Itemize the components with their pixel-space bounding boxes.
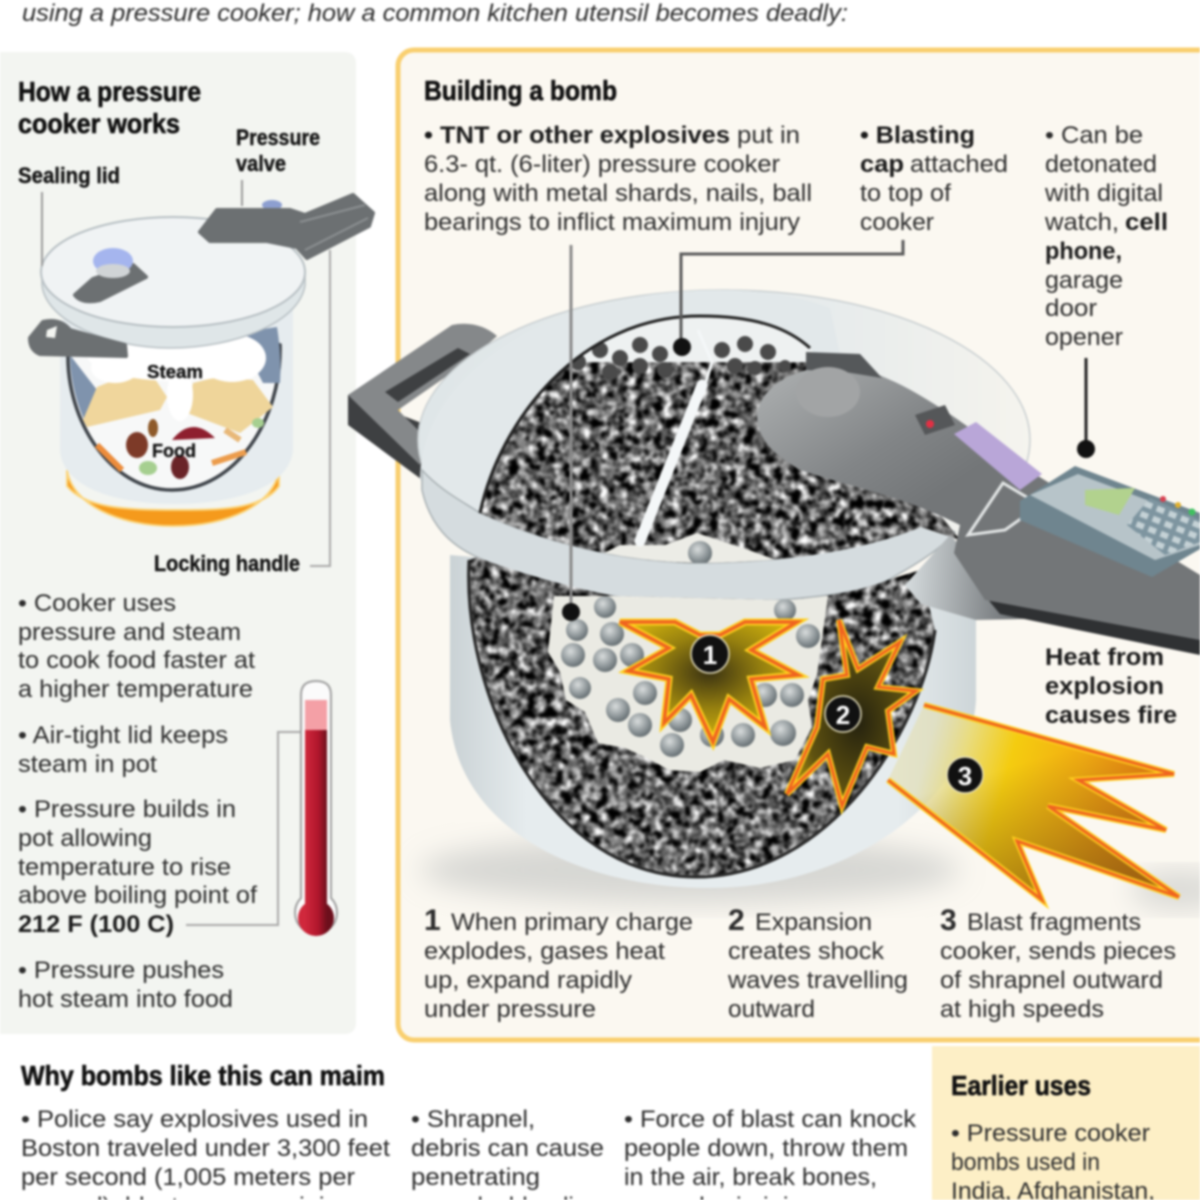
panel: building a bomb xyxy=(348,50,1200,1040)
text: heat from explosion xyxy=(1045,644,1177,729)
marker 1 xyxy=(691,635,729,673)
text: how it works bullets: pot allowing xyxy=(18,825,152,852)
text: earlier uses: bombs used in xyxy=(951,1149,1100,1176)
main charge xyxy=(548,596,828,772)
text: detonator: with digital xyxy=(1044,180,1163,207)
text: how it works bullets: • Air-tight lid keeps xyxy=(18,722,228,749)
text: how it works bullets: • Pressure pushes xyxy=(18,957,224,984)
text: explosives: put in xyxy=(737,122,800,149)
text: how it works bullets: steam in pot xyxy=(18,751,157,778)
label: food: Food xyxy=(152,441,196,461)
text: how it works bullets: hot steam into food xyxy=(18,986,233,1013)
pot body xyxy=(450,555,976,888)
text: explosive speed: • Police say explosives used in xyxy=(21,1106,368,1133)
step 3 text: Blast fragments xyxy=(967,909,1141,936)
text: shrapnel xyxy=(410,1106,604,1200)
label: pressure valve xyxy=(236,125,320,206)
step 2 text: 2 xyxy=(728,904,745,937)
label: sealing lid: Sealing lid xyxy=(18,163,120,188)
text: how it works bullets: to cook food faster at xyxy=(18,647,255,674)
text: explosive speed: per second (1,005 meters per xyxy=(21,1164,355,1191)
illustration: bomb cooker cutaway xyxy=(348,290,1200,910)
intro text: using a pressure cooker; how a common kitchen utensil becomes deadly: xyxy=(22,0,848,27)
lower window outline xyxy=(469,560,935,877)
leader line: detonator xyxy=(1077,358,1095,458)
heading: earlier uses: Earlier uses xyxy=(951,1070,1091,1101)
text: heat from explosion: Heat from xyxy=(1045,644,1164,671)
food pieces xyxy=(97,418,264,479)
label: pressure valve: valve xyxy=(236,151,286,176)
text: earlier uses xyxy=(951,1120,1155,1200)
label: locking handle xyxy=(154,250,330,576)
text: explosives xyxy=(424,122,812,236)
text: explosives: • TNT or other explosives xyxy=(424,122,730,149)
label: steam: Steam xyxy=(147,362,203,382)
text: how it works bullets: • Pressure builds in xyxy=(18,796,236,823)
text: heat from explosion: causes fire xyxy=(1045,702,1177,729)
step 3 text: at high speeds xyxy=(940,996,1104,1023)
text: detonator: detonated xyxy=(1045,151,1157,178)
step 2 text: creates shock xyxy=(728,938,885,965)
text: detonator: cell xyxy=(1125,209,1168,236)
text: force of blast: • Force of blast can knock xyxy=(624,1106,917,1133)
text: shrapnel: penetrating xyxy=(411,1164,540,1191)
lower cutaway with shrapnel xyxy=(455,550,945,885)
step 2 text: outward xyxy=(728,996,815,1023)
upper cutaway with shrapnel xyxy=(470,310,970,570)
heading: how a pressure cooker works: How a pressure xyxy=(18,76,201,107)
text: explosive speed: Boston traveled under 3,300 feet xyxy=(21,1135,390,1162)
heading: why bombs can maim: Why bombs like this can maim xyxy=(21,1060,385,1091)
text: detonator: watch, xyxy=(1044,209,1119,236)
burst 1 xyxy=(620,622,798,742)
blasting cap rod xyxy=(640,385,702,541)
step 1 text: up, expand rapidly xyxy=(424,967,632,994)
text: shrapnel: • Shrapnel, xyxy=(411,1106,535,1133)
step 1 text: When primary charge xyxy=(451,909,693,936)
text: how it works bullets: above boiling point of xyxy=(18,882,257,909)
text: how it works bullets: 212 F (100 C) xyxy=(18,911,174,938)
step 3 text: 3 xyxy=(940,904,957,937)
marker 2 xyxy=(825,696,861,732)
text: force of blast: in the air, break bones, xyxy=(624,1164,877,1191)
marker 3: 3 xyxy=(958,761,972,791)
label: locking handle: Locking handle xyxy=(154,551,300,576)
step 1 text: explodes, gases heat xyxy=(424,938,665,965)
illustration: small pressure cooker xyxy=(30,195,373,526)
step 2 text xyxy=(727,904,908,1023)
step 3 text: cooker, sends pieces xyxy=(940,938,1176,965)
fire blast xyxy=(888,705,1179,900)
text: earlier uses: • Pressure cooker xyxy=(951,1120,1150,1147)
text: how it works bullets xyxy=(18,590,257,1013)
text: detonator: • Can be xyxy=(1045,122,1143,149)
step 1 text: 1 xyxy=(424,904,441,937)
heading: how a pressure cooker works xyxy=(18,76,201,139)
text: explosives: 6.3- qt. (6-liter) pressure cooker xyxy=(424,151,780,178)
label: pressure valve: Pressure xyxy=(236,125,320,150)
text: blasting cap: cap xyxy=(860,151,904,178)
text: blasting cap xyxy=(860,122,1008,236)
text: blasting cap: to top of xyxy=(860,180,951,207)
text: force of blast: people down, throw them xyxy=(624,1135,908,1162)
text: detonator xyxy=(1044,122,1168,351)
label: sealing lid xyxy=(18,163,120,266)
text: how it works bullets: • Cooker uses xyxy=(18,590,176,617)
lid xyxy=(418,290,1030,605)
left pot handle xyxy=(348,324,497,482)
marker 1: 1 xyxy=(703,640,717,670)
panel: earlier uses xyxy=(932,1046,1200,1200)
text: shrapnel: debris can cause xyxy=(411,1135,604,1162)
text: how it works bullets: temperature to rise xyxy=(18,854,231,881)
step 1 text xyxy=(424,904,693,1023)
text: blasting cap: attached xyxy=(910,151,1008,178)
text: explosive speed xyxy=(21,1106,390,1200)
purple detonator strip xyxy=(954,422,1042,490)
text: how it works bullets: pressure and steam xyxy=(18,619,241,646)
burst 1 outline xyxy=(620,622,798,742)
burst 2 xyxy=(787,620,916,806)
blasting cap wires xyxy=(698,330,712,385)
text: detonator: garage xyxy=(1045,267,1123,294)
burst 2 outline xyxy=(787,620,916,806)
leader line: explosives xyxy=(562,245,580,621)
step 3 text: of shrapnel outward xyxy=(940,967,1163,994)
text: heat from explosion: explosion xyxy=(1045,673,1164,700)
section: why bombs like this can maim xyxy=(21,1060,917,1200)
marker 2: 2 xyxy=(836,700,850,730)
step 2 text: Expansion xyxy=(755,909,872,936)
text: explosives: along with metal shards, nails, ball xyxy=(424,180,812,207)
upper window outline xyxy=(480,316,810,513)
text: how it works bullets: a higher temperature xyxy=(18,676,253,703)
text: detonator: door xyxy=(1045,295,1097,322)
thermometer xyxy=(186,681,337,936)
text: blasting cap: cooker xyxy=(860,209,934,236)
text: force of blast xyxy=(624,1106,917,1200)
step 3 text xyxy=(940,904,1176,1023)
step 1 text: under pressure xyxy=(424,996,596,1023)
text: blasting cap: • Blasting xyxy=(860,122,975,149)
panel: how a pressure cooker works xyxy=(0,52,373,1034)
digital device xyxy=(1020,466,1200,577)
text: detonator: phone, xyxy=(1045,238,1122,265)
text: detonator: opener xyxy=(1045,324,1123,351)
cooker main handle xyxy=(757,352,1200,655)
heading: building a bomb: Building a bomb xyxy=(424,75,617,106)
step 2 text: waves travelling xyxy=(727,967,908,994)
marker 3 xyxy=(947,757,983,793)
heading: how a pressure cooker works: cooker works xyxy=(18,108,180,139)
text: explosives: bearings to inflict maximum injury xyxy=(424,209,800,236)
leader line: blasting cap xyxy=(673,240,903,356)
